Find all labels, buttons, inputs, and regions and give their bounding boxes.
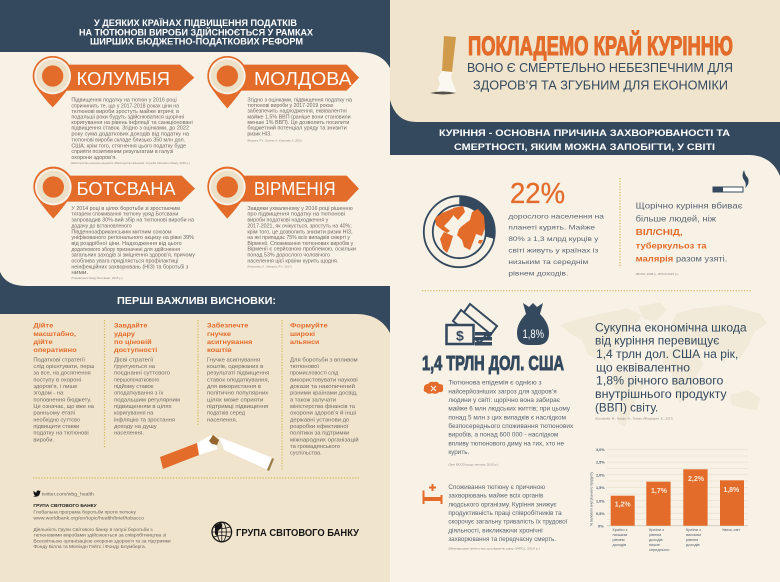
pin and banner: Botswana: БОТСВАНА xyxy=(77,178,176,199)
country: Moldova xyxy=(207,56,359,142)
column: act at scale xyxy=(33,322,95,443)
heading: column 3 xyxy=(207,322,252,354)
text: column 2: Дієві стратегії xyxy=(114,357,154,363)
icon: money bag 1.8% xyxy=(517,303,549,345)
text: Moldova: менше 1% ВВП). Це дозволить посилити xyxy=(247,120,349,126)
country: Armenia xyxy=(207,167,359,269)
x axis labels: Увесь світ xyxy=(722,527,740,532)
text: economic damage: від куріння перевищує xyxy=(595,335,719,348)
text: column 4: суспільства. xyxy=(290,451,322,457)
heading: column 2: Завдайте xyxy=(114,322,148,330)
heading: column 2: удару xyxy=(114,331,135,338)
text: column 2: населення. xyxy=(114,431,144,437)
pin and banner: Moldova: МОЛДОВА xyxy=(254,68,352,89)
text: economic damage xyxy=(595,321,747,421)
footer: contact text: www.worldbank.org/en/topic/health/brief/tobacco xyxy=(33,516,145,521)
bar: world: 1,8% xyxy=(723,487,740,494)
x axis labels: Країни з xyxy=(612,527,628,532)
text: column 3: для використання в xyxy=(207,384,261,390)
icon: money bag 1.8%: 1,8% xyxy=(522,327,544,341)
text: adult smokers: світі живуть у країнах із xyxy=(508,246,598,254)
text: column 3: коштів, одержаних в xyxy=(207,364,263,370)
text: diseases: скорочує загальну тривалість їх трудової xyxy=(448,518,568,526)
text: column 3: результаті підвищення xyxy=(207,371,269,377)
text: column 2: підйому ставок xyxy=(114,383,154,390)
text: Botswana: запровадив 30%-вий збір на тютюнові вироби на xyxy=(71,217,194,224)
x axis labels: рівнем xyxy=(649,532,661,537)
text: Colombia: сприяти позитивним результатам в галузі xyxy=(71,149,173,155)
heading: column 1: дійте xyxy=(33,338,53,346)
icon: banknotes and coins xyxy=(446,304,497,346)
text: column 2: доходу на душу xyxy=(114,424,157,430)
text: column 1: згодом - на xyxy=(33,391,64,397)
text: Moldova: майже 1,5% ВВП (раніше вони становили xyxy=(247,113,351,120)
x axis labels: нижче xyxy=(649,542,660,547)
heading: first conclusions: ПЕРШІ ВАЖЛИВІ ВИСНОВКИ: xyxy=(117,295,276,307)
heading: column 4 xyxy=(290,322,328,346)
heading: leading cause: КУРІННЯ - ОСНОВНА ПРИЧИНА ЗАХВОРЮВАНОСТІ ТА xyxy=(439,128,731,138)
heading: leading cause xyxy=(439,128,731,152)
stat: 22%: 22% xyxy=(510,178,565,210)
subtitle xyxy=(467,61,733,92)
text: column 1: необхідно суттєво xyxy=(33,417,80,423)
text: column 4: а також залучати xyxy=(290,397,336,403)
text: Armenia: на які припадає 75% всіх випадків смерті у xyxy=(247,235,350,241)
pin and banner: Armenia: ВІРМЕНІЯ xyxy=(254,178,336,199)
text: adult smokers: 80% з 1,3 млрд курців у xyxy=(508,235,599,243)
y axis labels: 2,0% xyxy=(596,473,605,477)
text: diseases: діяльності, викликаючи хронічні xyxy=(448,526,543,534)
heading: column 4: широкі xyxy=(290,330,315,338)
text: Botswana: уніфікованого регіонального акцизу на рівні 39% xyxy=(71,235,194,241)
text: adult smokers: дорослого населення на xyxy=(508,213,604,220)
text: diseases: людського організму. Куріння знижує xyxy=(448,500,557,508)
text: Botswana: загальних заходів зі зміцнення здоров’я, причому xyxy=(71,253,195,259)
x axis labels: Країни з xyxy=(686,527,701,532)
heading: column 3: асигнування xyxy=(207,339,252,346)
text: Botswana: неінфекційних захворювань (НІЗ) та боротьбі з xyxy=(71,263,189,270)
bar: lower middle income: 1,7% xyxy=(651,488,668,495)
text: Armenia: населення цієї країни курить щодня. xyxy=(247,258,338,264)
text: tobacco epidemic: впливу тютюнового диму на тих, хто не xyxy=(448,440,565,447)
panel: country reforms xyxy=(0,52,390,286)
text: diseases xyxy=(448,484,568,551)
text: tobacco epidemic: виробів, а понад 600 000 - наслідком xyxy=(448,432,558,439)
text: tobacco epidemic: Тютюнова епідемія є однією з xyxy=(448,380,542,387)
text: Botswana: тягарем споживання тютюну уряд Ботсвани xyxy=(71,212,178,218)
text: Armenia: понад 53% дорослого чоловічого xyxy=(247,253,330,259)
text: column 3: підтримці підвищення xyxy=(207,404,268,410)
stat: 1.4 trillion: 1,4 ТРЛН ДОЛ. США xyxy=(422,352,564,375)
text: column 4: міністерства фінансів та xyxy=(290,404,356,410)
text: Colombia: підвищення ставок. Згідно з оцінками, до 2022 xyxy=(71,126,189,132)
text: tobacco epidemic: курить. xyxy=(448,449,470,456)
text: Armenia: Вірменії є серйозною проблемою, оскільки xyxy=(247,246,356,253)
text: economic damage: внутрішнього продукту xyxy=(595,388,727,401)
text: Botswana: від роздрібної ціни. Надходження від цього xyxy=(71,241,182,247)
logo: World Bank Group: ГРУПА СВІТОВОГО БАНКУ xyxy=(236,528,360,539)
footer: contact text: Всесвітньою організацією охорони здоров’я та за підтримки xyxy=(33,538,171,543)
text: Botswana: додачу до встановленого xyxy=(71,224,132,230)
text: column 4: промисловості слід xyxy=(290,371,339,377)
text: column 4: міжнародних організацій xyxy=(290,436,359,443)
text: Colombia: Підвищення податку на тютюн у 2016 році xyxy=(71,98,177,104)
icon: cigarette butt xyxy=(430,36,456,94)
text: column 1: здоров’я, і лише xyxy=(33,384,77,390)
text: tobacco epidemic xyxy=(448,380,574,467)
text: column 2: коригування на xyxy=(114,411,154,417)
text: column 4 xyxy=(290,357,359,457)
heading: reforms: НА ТЮТЮНОВІ ВИРОБИ ЗДІЙСНЮЄТЬСЯ У РАМКАХ xyxy=(79,26,314,37)
text: annual deaths: разом узяті. xyxy=(676,254,727,264)
text: column 3: політично популярних xyxy=(207,391,269,397)
text: column 1: поповнення бюджету. xyxy=(33,397,92,403)
text: Moldova: забезпечить надходження, еквівалентні xyxy=(247,109,347,115)
column: alliances xyxy=(290,322,359,457)
text: column 2: підвищенням в цілях xyxy=(114,404,172,410)
text: Moldova: тютюнові вироби у 2017-2019 роках xyxy=(247,103,334,109)
text: column 1: Це означає, що вже на xyxy=(33,404,95,410)
text: Armenia: вироби податкові надходження у xyxy=(247,218,329,224)
x axis labels: рівнем xyxy=(686,537,698,542)
text: column 1: ранньому етапі xyxy=(33,411,75,417)
text: column 4: розробки ефективної xyxy=(290,424,349,430)
text: column 2: ґрунтуються на xyxy=(114,363,156,370)
text: Moldova: Згідно з оцінками, підвищення податку на xyxy=(247,98,352,104)
text: column 4: тютюнової xyxy=(290,364,320,370)
x axis labels: високим xyxy=(686,532,701,537)
x axis labels xyxy=(612,527,740,552)
text: column 1: слід орієнтувати, перш xyxy=(33,364,95,370)
heading: column 1 xyxy=(33,322,77,354)
text: Armenia: крім того, це дозволить знизити ризик НІЗ, xyxy=(247,229,353,235)
text: Botswana: (Управління Уряду Ботсвани, 2015 р.) xyxy=(71,276,123,280)
text: annual deaths: туберкульоз та xyxy=(636,240,707,250)
icon: lungs cross xyxy=(424,382,443,394)
text: economic damage: 1,8% річного валового xyxy=(596,375,723,388)
x axis labels: доходів xyxy=(686,542,700,547)
column: funds xyxy=(207,322,270,423)
text: column 2: поєднанні суттєвого xyxy=(114,371,170,377)
y axis labels: 1,0% xyxy=(596,499,605,503)
pin and banner: Moldova xyxy=(207,56,359,108)
text: annual deaths: малярія xyxy=(636,254,673,264)
text: Botswana: особлива увага приділяється профілактиці xyxy=(71,258,178,264)
text: economic damage: (ВВП) світу. xyxy=(595,401,658,414)
text: column 4: різними країнами досвід, xyxy=(290,391,358,397)
text: annual deaths xyxy=(636,200,743,276)
text: Colombia: США; крім того, стягнення цього податку буде xyxy=(71,144,186,150)
x axis labels: низьким xyxy=(612,532,628,537)
footer: contact text: Глобальна програма боротьби проти тютюну xyxy=(33,509,137,514)
icon: twitter bird xyxy=(33,490,41,497)
text: Moldova: бюджетний потенціал уряду та знизити xyxy=(247,125,347,132)
text: annual deaths: Щорічно куріння вбиває xyxy=(636,200,743,210)
heading: reforms xyxy=(79,17,314,46)
footer: contact text: twitter.com/wbg_health xyxy=(42,492,95,497)
y axis title: % валового внутрішнього продукту xyxy=(590,472,594,526)
text: column 3: податків серед xyxy=(207,411,246,417)
text: column 3: цілях може сприяти xyxy=(207,397,263,403)
text: Botswana: У 2014 році в цілях боротьби зі зростаючим xyxy=(71,206,180,212)
pin and banner: Colombia xyxy=(33,56,194,107)
column: price xyxy=(114,322,180,437)
text: tobacco epidemic: безпосереднього споживання тютюнових xyxy=(448,423,574,430)
y axis labels: 0,5% xyxy=(596,512,605,516)
text: Armenia: Завдяки ухваленому у 2016 році рішенню xyxy=(247,206,353,212)
heading: column 1: оперативно xyxy=(33,347,77,354)
text: economic damage: Сукупна економічна шкода xyxy=(595,321,747,334)
heading: column 2 xyxy=(114,322,157,354)
text: Colombia: (Міністерство охорони здоров’я, Міністерство фінансів, Служба Світового банку, 2016 р.) xyxy=(71,161,190,165)
text: tobacco epidemic: (Звіт ВООЗ щодо тютюну, 2015 р.) xyxy=(448,463,498,467)
text: Armenia: (Krasovsky, K., Marquez, P.V., 2017) xyxy=(247,265,292,269)
bar: world xyxy=(720,480,744,526)
icon: cigarette with smoke xyxy=(713,170,749,192)
footer: contact text: Фонду Білла та Меліндн Гейтс і Фонду Блумберга. xyxy=(33,543,146,549)
heading: column 2: доступності xyxy=(114,346,157,354)
heading: column 1: масштабно, xyxy=(33,330,76,338)
y axis labels: 0% xyxy=(598,524,604,528)
text: column 4: використовувати наукові xyxy=(290,377,358,383)
text: annual deaths: більше людей, ніж xyxy=(636,214,716,224)
text: column 1: поступу в охороні xyxy=(33,377,81,383)
text: column 4: охорони здоров’я й інші xyxy=(290,410,356,417)
text: tobacco epidemic: понад 5 млн з цих випадків є наслідком xyxy=(448,414,566,421)
text: Armenia: Вірменії. Споживання тютюнових виробів у xyxy=(247,241,354,247)
text: column 1 xyxy=(33,357,95,443)
text: adult smokers: рівнем доходів. xyxy=(508,270,568,278)
heading: column 3: Забезпечте xyxy=(207,322,249,330)
text: column 4: державні установи до xyxy=(290,417,349,423)
x axis labels: середнього xyxy=(649,547,669,552)
heading: reforms: ШИРШИХ БЮДЖЕТНО-ПОДАТКОВИХ РЕФОРМ xyxy=(90,36,303,46)
text: Colombia: коригування на рівень інфляції та санкціоновані xyxy=(71,120,193,126)
text: adult smokers: низьким та середнім xyxy=(508,258,589,266)
bar: high income xyxy=(683,469,708,526)
text: economic damage: що еквівалентно xyxy=(596,361,690,374)
text: economic damage: (Goodchild, M., Nargis, N., Tursan d’Espaignet, E., 2017) xyxy=(595,417,673,421)
text: column 3 xyxy=(207,357,270,423)
text: Botswana xyxy=(71,206,195,280)
subtitle: ЗДОРОВ’Я ТА ЗГУБНИМ ДЛЯ ЕКОНОМІКИ xyxy=(473,78,728,92)
text: Colombia: подальші роки будуть здійснюватися щорічні xyxy=(71,113,184,120)
heading: column 3: гнучке xyxy=(207,331,231,338)
text: column 1: вироби. xyxy=(33,437,54,443)
icon: broken cigarette xyxy=(160,435,274,471)
text: diseases: продуктивність праці співробітників та xyxy=(448,509,562,517)
text: column 4: докази та накопичений xyxy=(290,383,355,390)
text: column 1: Податкові стратегії xyxy=(33,357,85,363)
text: economic damage: 1,4 трлн дол. США на рік, xyxy=(596,348,738,361)
text: tobacco epidemic: людини у світі: щорічно вона забирає xyxy=(448,397,560,404)
text: adult smokers xyxy=(508,213,604,278)
y axis labels: 2,5% xyxy=(596,461,605,465)
y axis labels: 1,5% xyxy=(596,486,605,490)
text: column 3: Гнучке асигнування xyxy=(207,357,260,363)
heading: column 2: по ціновій xyxy=(114,338,152,346)
text: tobacco epidemic: найсерйозніших загроз для здоров’я xyxy=(448,388,557,395)
text: annual deaths: (ВООЗ, 2008 р., ВООЗ 2015 р.) xyxy=(636,272,678,276)
pin and banner: Armenia xyxy=(207,167,359,219)
text: column 2 xyxy=(114,357,180,437)
text: Moldova: (Marquez, P.V., Sourina, A., Krasovsky, K. 2016) xyxy=(247,138,302,142)
footer: contact text: ГРУПА СВІТОВОГО БАНКУ xyxy=(33,503,97,508)
heading: column 3: коштів xyxy=(207,346,232,354)
text: column 2: інфляцію та зростання xyxy=(114,417,175,423)
panel: first conclusions xyxy=(0,314,390,582)
country: Botswana xyxy=(33,167,195,280)
y axis labels: 3,0% xyxy=(596,448,605,452)
text: Colombia: охорони здоров’я. xyxy=(71,155,117,161)
text: Armenia: про підвищення податку на тютюнові xyxy=(247,212,345,218)
text: diseases: Споживання тютюну є причиною xyxy=(448,484,545,491)
text: tobacco epidemic: майже 6 млн людських життів; при цьому xyxy=(448,406,571,413)
heading: column 4: альянси xyxy=(290,339,319,346)
text: Armenia xyxy=(247,206,356,269)
x axis labels: доходів xyxy=(612,542,626,547)
text: diseases: захворювань майже всіх органів xyxy=(448,492,544,500)
text: Colombia: спричинить те, що у 2017-2018 роках ціни на xyxy=(71,103,179,109)
text: column 2: подальшим регулярним xyxy=(114,397,180,403)
y axis labels xyxy=(596,448,605,528)
heading: column 4: Формуйте xyxy=(290,322,328,330)
text: Moldova: ризик НІЗ. xyxy=(247,132,272,138)
text: Moldova xyxy=(247,98,352,142)
x axis labels: Країни з xyxy=(649,527,664,532)
text: column 4: політики за підтримки xyxy=(290,431,349,437)
text: Colombia: тютюнові вироби складе близько 350 млн дол. xyxy=(71,138,185,144)
text: column 1: за все, на досягнення xyxy=(33,371,91,377)
bar: low income: 1,2% xyxy=(615,502,631,508)
panel: statistics xyxy=(390,155,780,582)
text: column 1: податку на тютюнові xyxy=(33,431,89,437)
subtitle: ВОНО Є СМЕРТЕЛЬНО НЕБЕЗПЕЧНИМ ДЛЯ xyxy=(467,61,733,75)
heading: leading cause: СМЕРТНОСТІ, ЯКИМ МОЖНА ЗАПОБІГТИ, У СВІТІ xyxy=(454,142,715,152)
bar: lower middle income xyxy=(646,482,671,526)
bar chart: GDP loss by income group xyxy=(590,448,748,552)
text: adult smokers: планеті курять. Майже xyxy=(508,224,595,232)
bar: high income: 2,2% xyxy=(688,476,705,483)
text: Colombia: тютюнові вироби зростуть майже втричі; в xyxy=(71,108,179,115)
x axis labels: рівнем xyxy=(612,537,625,542)
text: Botswana: Південноафриканським митним союзом xyxy=(71,229,172,235)
panel: title area xyxy=(390,0,780,122)
pin and banner: Botswana xyxy=(33,167,195,219)
text: column 2: оподаткування з їх xyxy=(114,391,164,397)
background: world map xyxy=(560,302,767,427)
text: column 4: Для боротьби з впливом xyxy=(290,357,358,363)
heading: reforms: У ДЕЯКИХ КРАЇНАХ ПІДВИЩЕННЯ ПОДАТКІВ xyxy=(94,17,297,28)
text: Botswana: додаткового збору призначені для здійснення xyxy=(71,246,180,253)
text: diseases: захворювання та передчасну смерть. xyxy=(448,536,556,543)
country: Colombia xyxy=(33,56,194,165)
text: diseases: (Міжнародне агентство досліджень раку (IARC), 2014 р.) xyxy=(448,547,540,551)
text: column 3: ставок оподаткування, xyxy=(207,377,270,383)
logo: World Bank Group xyxy=(212,522,360,542)
text: column 3: населення. xyxy=(207,417,238,423)
text: column 4: та громадянського xyxy=(290,444,340,450)
text: Colombia xyxy=(71,98,193,165)
text: column 2: першопочаткового xyxy=(114,377,159,383)
pin and banner: Colombia: КОЛУМБІЯ xyxy=(77,68,170,89)
icon: banknotes and coins: $ xyxy=(456,328,464,344)
footer: contact text: Діяльність Групи Світового банку в галузі боротьби з xyxy=(33,527,153,532)
text: Botswana: ними. xyxy=(71,270,88,276)
text: Colombia: року сума додаткових доходів від податку на xyxy=(71,132,189,138)
icon: globe with 22% ring xyxy=(424,196,495,267)
footer: contact text xyxy=(33,492,171,549)
icon: hospital bed xyxy=(422,484,442,504)
text: annual deaths: ВІЛ/СНІД, xyxy=(636,227,683,237)
text: Armenia: 2017-2021, як очікується, зростуть на 40%; xyxy=(247,224,352,230)
footer: contact text: тютюновими виробами здійснюється за співробітництва зі xyxy=(33,532,166,538)
bar: low income xyxy=(611,496,635,526)
text: column 1: підвищити ставки xyxy=(33,424,79,430)
x axis labels: доходів xyxy=(649,537,663,542)
heading: column 1: Дійте xyxy=(33,322,54,330)
